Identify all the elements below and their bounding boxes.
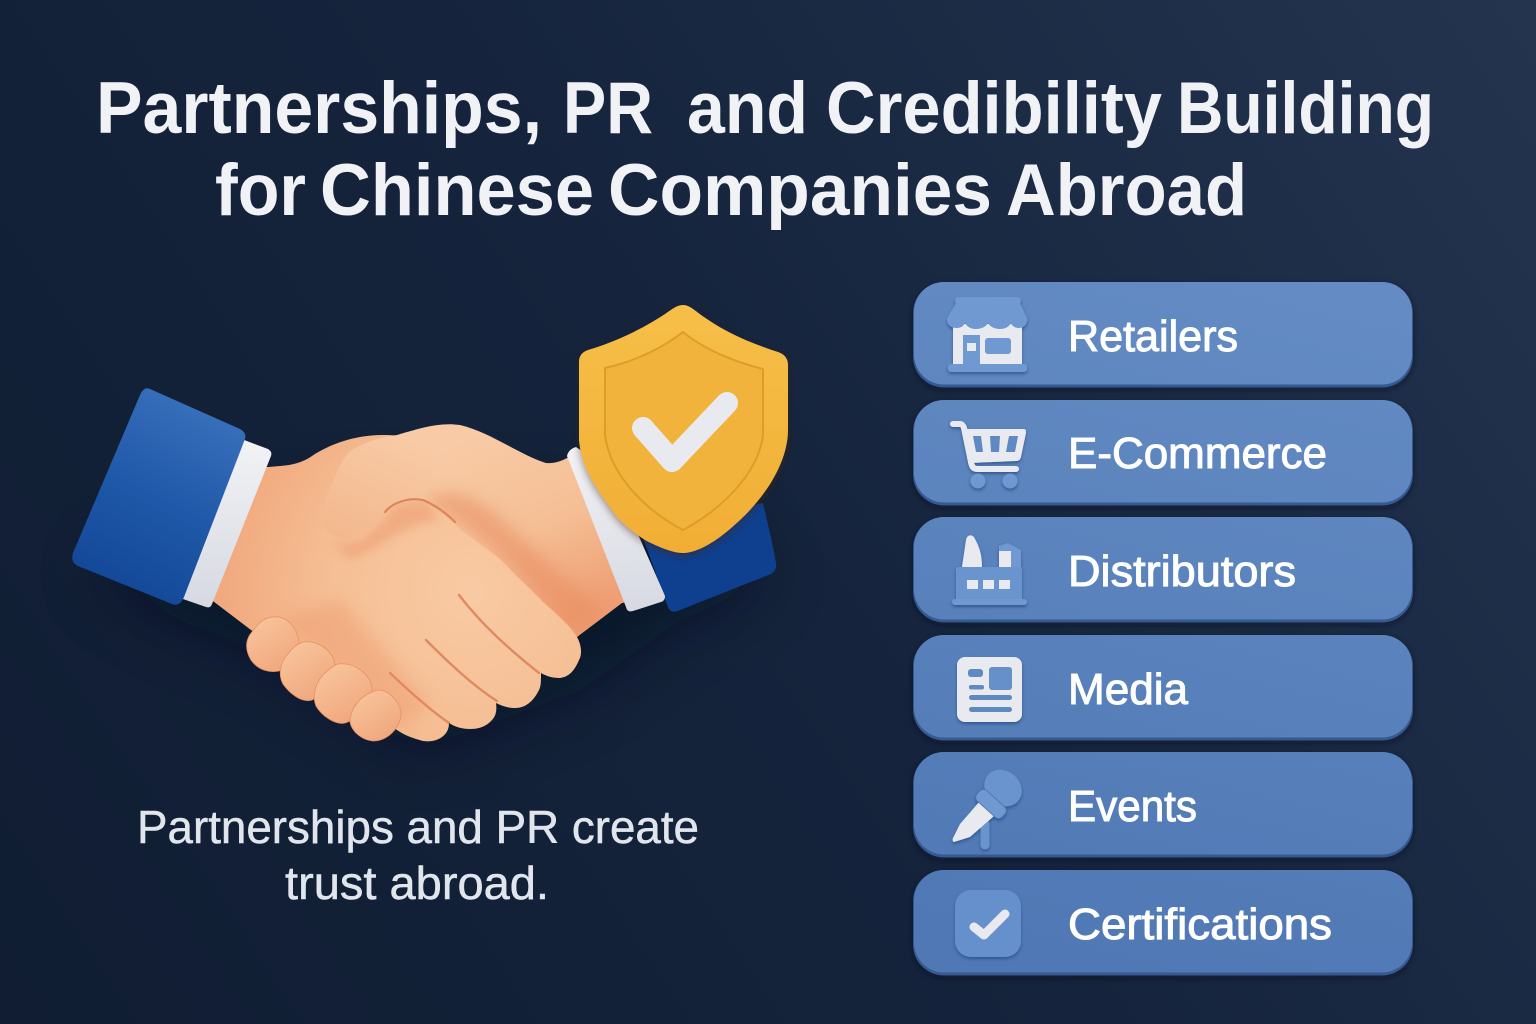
left hand (front) with fingers [205,435,581,741]
label: Certifications: Certifications [1068,900,1332,949]
label: Events: Events [1068,782,1197,831]
icon: newspaper [957,657,1022,722]
title: and [687,68,808,149]
finger creases [390,595,539,723]
icon: factory [952,535,1027,605]
shield checkmark [643,403,727,461]
row: Distributors [913,517,1413,625]
right shirt cuff [567,447,665,611]
label: Media: Media [1068,665,1189,714]
right hand (back) [390,424,645,637]
title: Building [1177,68,1434,149]
title: PR [563,68,653,149]
title [96,68,1434,231]
shield badge [579,305,788,553]
row: Retailers [913,282,1413,390]
title: Companies [608,150,992,231]
illustration: handshake with shield [72,305,788,750]
right sleeve [640,503,776,612]
label: E-Commerce: E-Commerce [1068,429,1327,478]
clasped fingers [247,617,401,741]
title: Partnerships, [96,68,542,149]
caption: trust abroad. [285,857,549,909]
left sleeve [72,388,245,605]
soft shadow behind handshake [90,500,770,750]
row: Events [913,752,1413,860]
label: Retailers: Retailers [1068,312,1238,361]
title: Abroad [1006,150,1247,231]
caption [137,801,699,909]
title: Credibility [826,68,1162,149]
thumb [321,435,455,538]
icon: microphone [953,762,1029,845]
title: Chinese [320,150,594,231]
row: E-Commerce [913,400,1413,508]
left shirt cuff [177,438,271,607]
title: for [215,150,306,231]
label: Distributors: Distributors [1068,547,1296,596]
row: Certifications [913,870,1413,978]
row: Media [913,635,1413,743]
icon: storefront [947,297,1027,372]
icon: checkbox [955,890,1021,957]
icon: shopping cart [953,424,1026,488]
panel: partner channel list [913,282,1413,978]
caption: Partnerships and PR create [137,801,699,853]
